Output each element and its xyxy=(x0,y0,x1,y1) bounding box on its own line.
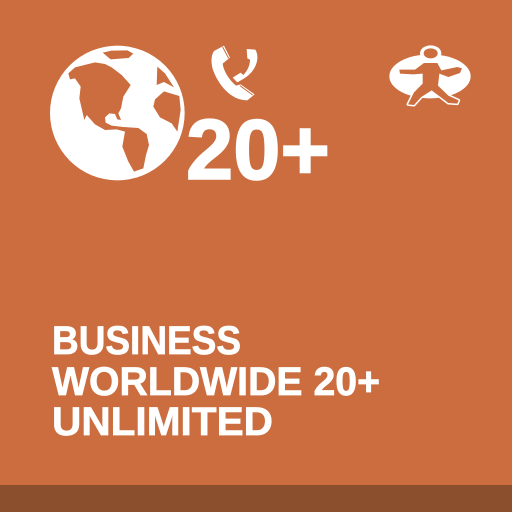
title: UNLIMITED xyxy=(52,400,273,444)
icon: telephone xyxy=(212,46,257,100)
stat: 20+: 20+ xyxy=(186,103,330,198)
icon: person in oval xyxy=(389,45,471,105)
title xyxy=(52,319,380,444)
title: WORLDWIDE 20+ xyxy=(52,360,380,404)
icon: globe xyxy=(50,46,185,180)
title: BUSINESS xyxy=(52,319,241,363)
bottom band xyxy=(0,485,512,512)
